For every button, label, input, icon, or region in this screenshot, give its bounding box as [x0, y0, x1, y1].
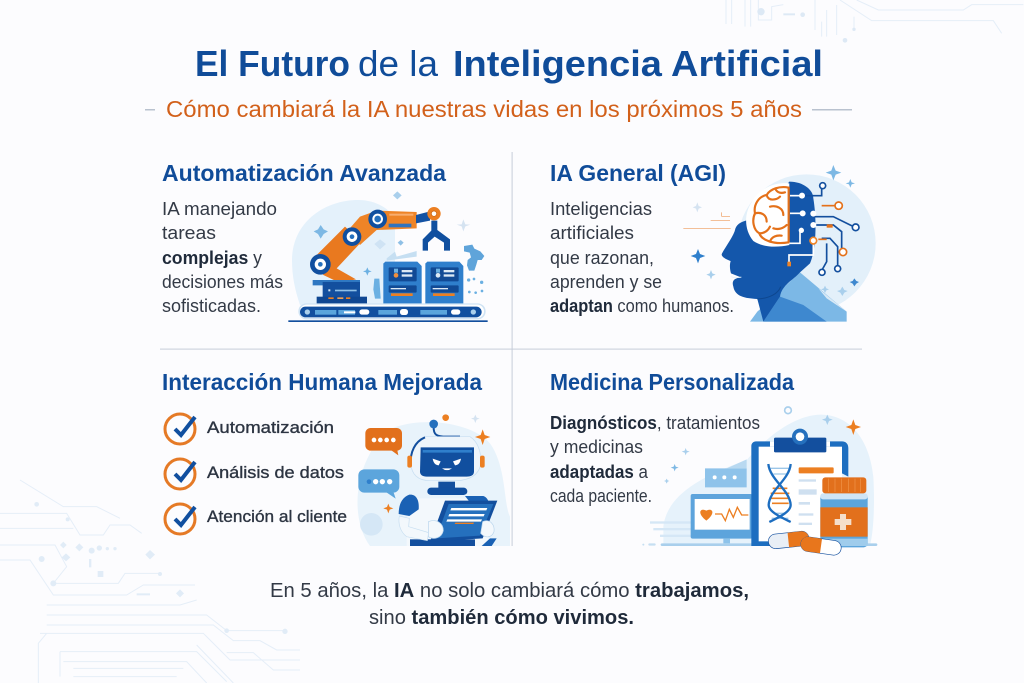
heading: automatización: Automatización Avanzada	[162, 160, 446, 186]
hands	[428, 521, 443, 538]
speed lines	[650, 521, 693, 537]
dna	[771, 488, 790, 503]
head	[411, 437, 481, 481]
check item: automatización	[165, 414, 334, 444]
tablet	[430, 501, 497, 542]
title: Inteligencia Artificial	[453, 43, 823, 84]
text block: medicina	[550, 412, 760, 506]
text block: medicina: Diagnósticos, tratamientos	[550, 412, 760, 433]
check item: atención al cliente	[165, 504, 347, 534]
boxes	[383, 262, 422, 304]
text block: automatización: IA manejando	[162, 198, 277, 219]
text block: IA general: artificiales	[550, 222, 634, 243]
subtitle: Cómo cambiará la IA nuestras vidas en los próximos 5 años	[166, 96, 802, 122]
footer statement	[270, 579, 749, 629]
bottle	[820, 493, 868, 547]
text block: IA general: Inteligencias	[550, 198, 652, 219]
panel: medicina personalizada	[550, 369, 877, 556]
speech bubbles	[365, 428, 402, 451]
base	[313, 280, 360, 285]
panel: interacción humana	[162, 369, 510, 546]
icon: chatbot robot	[357, 414, 510, 546]
text block: IA general: adaptan como humanos.	[550, 295, 734, 316]
gear	[464, 245, 484, 271]
panel: IA general	[550, 160, 876, 322]
clipboard	[751, 441, 848, 546]
left arm	[399, 495, 419, 516]
body	[407, 498, 488, 546]
icon: robot arm and conveyor	[288, 191, 488, 322]
check item: análisis de datos: Análisis de datos	[207, 463, 344, 482]
text block: medicina: cada paciente.	[550, 485, 652, 506]
monitor	[705, 468, 747, 487]
heading: IA general: IA General (AGI)	[550, 160, 726, 186]
text block: automatización: complejas y	[162, 247, 263, 268]
text block: IA general: aprenden y se	[550, 271, 662, 292]
arm	[313, 227, 362, 283]
text block: medicina: y medicinas	[550, 436, 643, 457]
shoulder	[750, 272, 847, 322]
title: El Futuro	[195, 43, 350, 84]
text block: automatización: tareas	[162, 222, 216, 243]
title	[195, 43, 823, 84]
icon: clipboard, DNA and medicine	[642, 407, 877, 556]
title: de la	[358, 43, 439, 84]
footer statement: En 5 años, la IA no solo cambiará cómo trabajamos,	[270, 579, 749, 602]
circuits	[803, 188, 855, 270]
icon: head with brain and circuits	[683, 165, 876, 322]
text block: automatización: sofisticadas.	[162, 295, 261, 316]
text block: automatización	[162, 198, 283, 316]
pills	[768, 531, 810, 549]
conveyor	[298, 303, 486, 319]
text block: IA general: que razonan,	[550, 247, 654, 268]
heading: medicina: Medicina Personalizada	[550, 369, 794, 395]
footer statement: sino también cómo vivimos.	[369, 606, 634, 629]
text block: IA general	[550, 198, 734, 316]
head	[722, 182, 816, 322]
panel: automatización avanzada	[162, 160, 488, 322]
brain	[746, 183, 789, 247]
checklist	[165, 414, 347, 534]
check item: atención al cliente: Atención al cliente	[207, 507, 347, 526]
text block: automatización: decisiones más	[162, 271, 283, 292]
antenna	[434, 427, 460, 437]
heading: interacción: Interacción Humana Mejorada	[162, 369, 482, 395]
text block: medicina: adaptadas a	[550, 461, 649, 482]
check item: análisis de datos	[165, 459, 344, 489]
check item: automatización: Automatización	[207, 418, 334, 437]
